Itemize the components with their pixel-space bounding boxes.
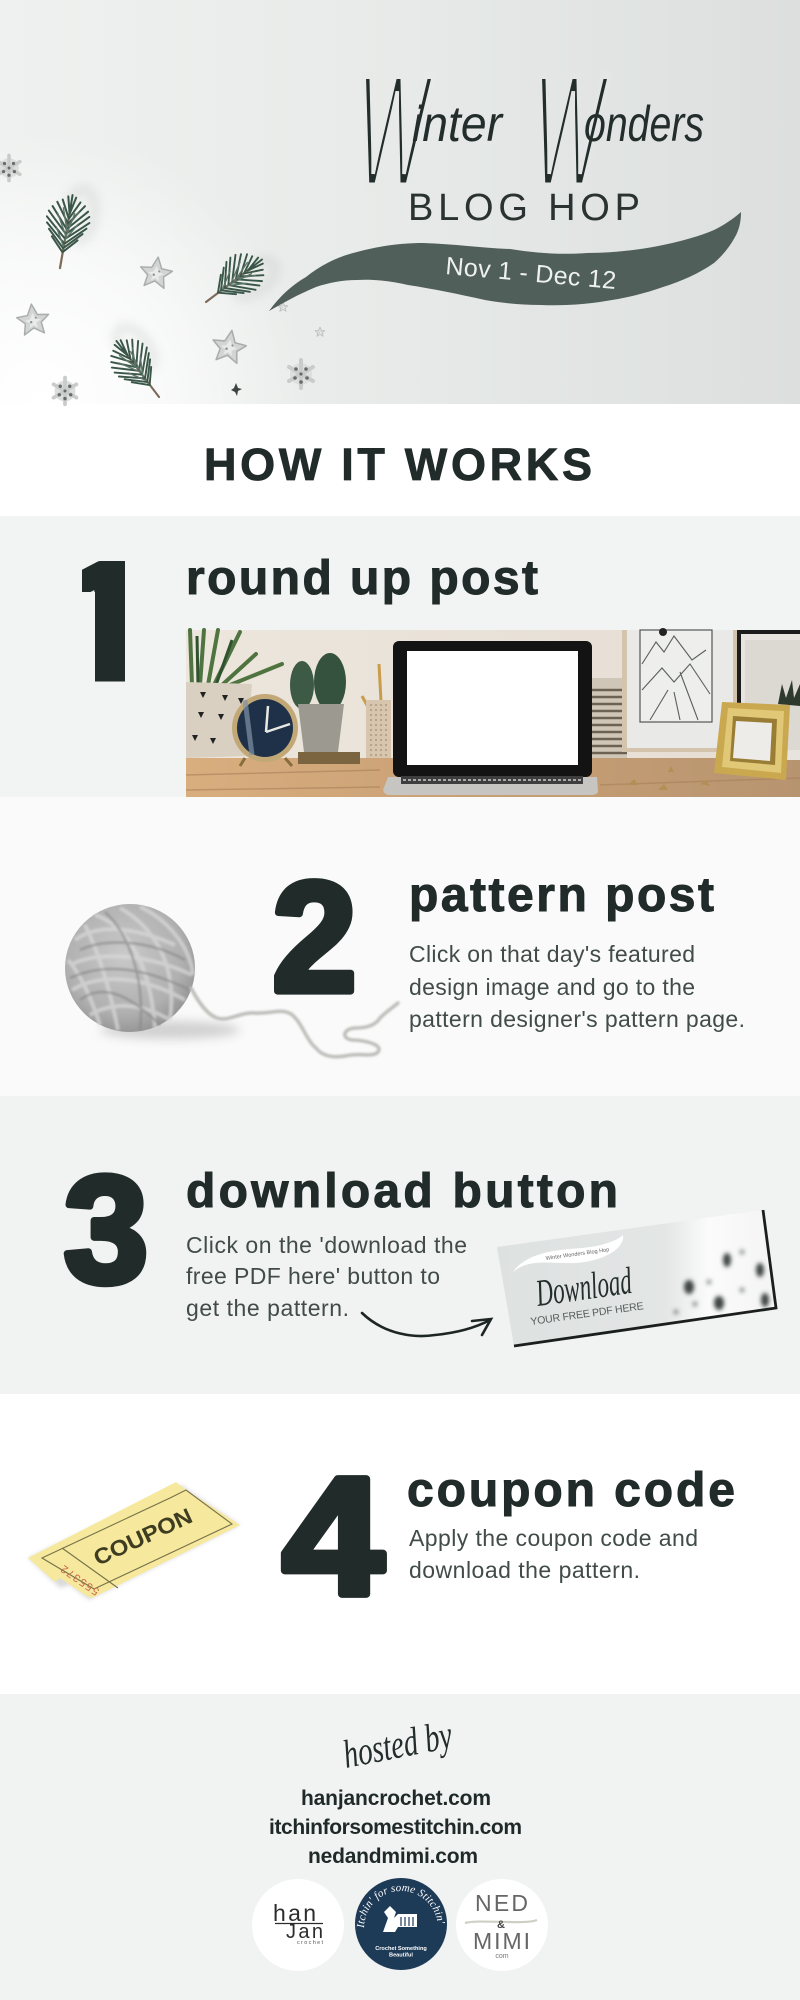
- script heading: hosted by: hosted by: [339, 1712, 456, 1777]
- body text: free PDF here' button to: [186, 1263, 440, 1289]
- heading: download button: [186, 1165, 618, 1218]
- body text: [409, 941, 745, 1032]
- striped canister: [592, 678, 627, 758]
- cactus and metal pot: [290, 653, 360, 764]
- photo: yellow coupon: 555372: [59, 1562, 102, 1597]
- heading: pattern post: [409, 869, 714, 922]
- brass pins: [628, 766, 710, 790]
- swoosh banner with dates: [269, 212, 741, 311]
- clock: [232, 694, 298, 766]
- host website list: itchinforsomestitchin.com: [269, 1816, 522, 1839]
- date label: Nov 1 - Dec 12: [444, 252, 617, 295]
- body text: download the pattern.: [409, 1557, 640, 1583]
- panel: step 3 download button: [0, 1096, 800, 1394]
- download button preview: [497, 1210, 776, 1346]
- panel: step 2 pattern post: [0, 797, 800, 1096]
- panel: step 4 coupon code: [0, 1394, 800, 1694]
- dark picture frame: [737, 630, 800, 760]
- laptop: [383, 641, 598, 795]
- body text: Click on the 'download the: [186, 1232, 467, 1258]
- arrow to button: [362, 1313, 491, 1336]
- heading: HOW IT WORKS: HOW IT WORKS: [204, 439, 592, 490]
- gold photo frame: [714, 702, 790, 780]
- title: Winter Wonders: inter: [412, 96, 505, 153]
- logo: itchin for some stitchin: Crochet Something: [375, 1946, 427, 1952]
- host website list: hanjancrochet.com: [301, 1787, 491, 1810]
- logo: han jan crochet: [252, 1879, 344, 1971]
- logo: han jan crochet: crochet: [297, 1940, 323, 1946]
- heading: round up post: [186, 552, 538, 605]
- host website list: [269, 1787, 522, 1868]
- body text: pattern designer's pattern page.: [409, 1006, 745, 1032]
- logo: itchin for some stitchin: Beautiful: [389, 1952, 413, 1958]
- framed mountain art: [622, 628, 737, 752]
- logo: han jan crochet: Jan: [286, 1921, 323, 1943]
- logo: ned and mimi: com: [495, 1953, 509, 1960]
- logo: itchin for some stitchin: Itchin' for some Stitchin': [356, 1886, 445, 1928]
- plant and pot: [186, 630, 282, 758]
- photo: yellow coupon: [28, 1482, 240, 1600]
- photo: desk with laptop: [186, 628, 800, 797]
- title: Winter Wonders: W: [348, 39, 438, 221]
- download button preview: Winter Wonders Blog Hop: [545, 1247, 610, 1262]
- host website list: nedandmimi.com: [308, 1845, 478, 1868]
- download button preview: Download: [533, 1260, 635, 1315]
- subtitle: BLOG HOP: BLOG HOP: [408, 187, 640, 229]
- panel: hosted by footer: [0, 1694, 800, 2000]
- loose yarn strand: [191, 988, 398, 1057]
- logo: ned and mimi: MIMI: [473, 1928, 530, 1954]
- body text: [186, 1232, 467, 1321]
- body text: get the pattern.: [186, 1295, 349, 1321]
- heading: coupon code: [407, 1464, 735, 1517]
- title: Winter Wonders: [348, 39, 704, 221]
- photo: yellow coupon: COUPON: [90, 1503, 196, 1571]
- logo: ned and mimi: NED: [475, 1890, 528, 1916]
- number 1: 1: [51, 529, 165, 713]
- body text: Click on that day's featured: [409, 941, 695, 967]
- panel: header banner: [0, 0, 800, 409]
- number 3: 3: [64, 1145, 148, 1315]
- body text: design image and go to the: [409, 974, 695, 1000]
- photo: ball of yarn: [65, 904, 398, 1057]
- title: Winter Wonders: onders: [584, 96, 704, 153]
- pencil cup: [362, 664, 391, 758]
- download button preview: YOUR FREE PDF HERE: [530, 1300, 644, 1328]
- logo: ned and mimi: &: [497, 1919, 505, 1931]
- decoration: pine sprigs, stars and snowflakes: [0, 155, 325, 409]
- body text: [409, 1525, 698, 1583]
- logo: itchin for some stitchin: [355, 1878, 447, 1970]
- panel: step 1 round up post: [0, 516, 800, 797]
- logo: han jan crochet: han: [273, 1900, 316, 1926]
- blurred pine and star specks: [674, 1250, 769, 1314]
- title: Winter Wonders: W: [524, 39, 614, 221]
- logo: ned and mimi: [456, 1879, 548, 1971]
- number 2: 2: [272, 849, 357, 1024]
- body text: Apply the coupon code and: [409, 1525, 698, 1551]
- number 4: 4: [282, 1444, 384, 1630]
